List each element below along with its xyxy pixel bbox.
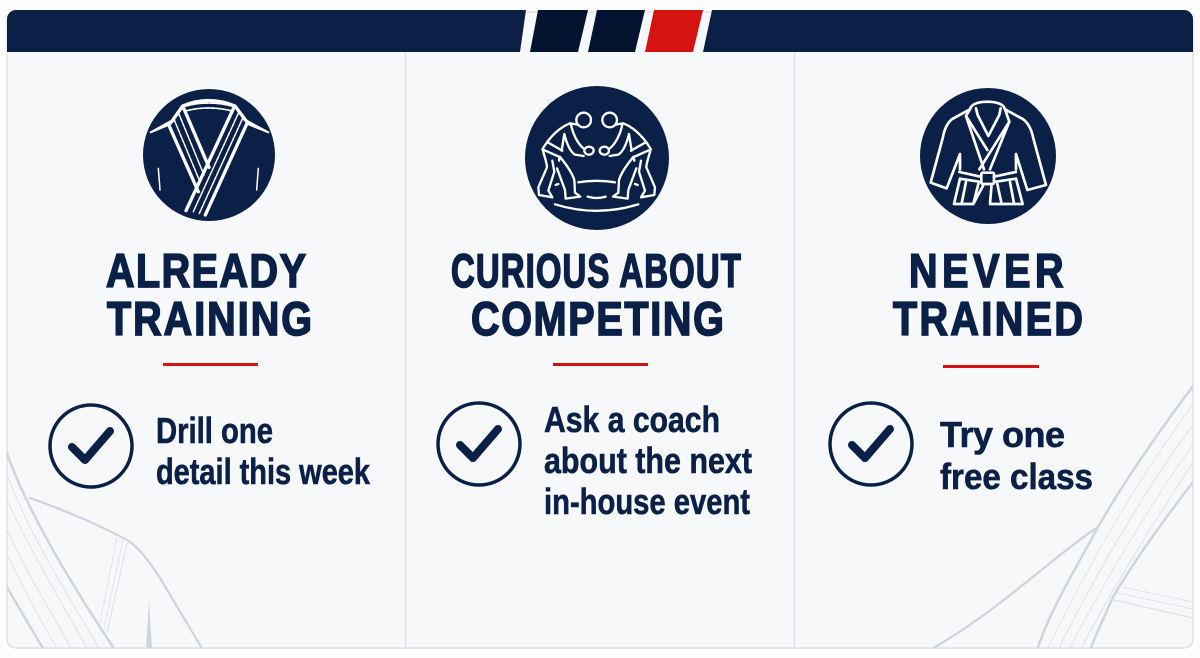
panel: curious about competing (438, 86, 752, 522)
action text (940, 414, 1093, 497)
panel: already training (50, 89, 371, 492)
red rule (553, 363, 648, 366)
red accent stripe (645, 10, 703, 52)
action text: detail this week (156, 451, 371, 492)
action text (156, 410, 371, 492)
icon: gi collar (143, 89, 275, 221)
header band (7, 10, 1193, 52)
red rule (943, 365, 1039, 368)
icon: gi jacket with belt (920, 88, 1056, 224)
action text: Try one (940, 414, 1065, 455)
heading: curious about competing: CURIOUS ABOUT (451, 244, 741, 297)
red rule (163, 363, 258, 366)
icon: check circle (438, 403, 520, 485)
panel: never trained (830, 88, 1093, 497)
action text: Ask a coach (544, 399, 720, 440)
panel: curious about competing: COMPETING (471, 294, 724, 346)
icon: check circle (830, 403, 912, 485)
left competitor (538, 113, 594, 199)
heading: never trained: NEVER (909, 246, 1064, 298)
background gi line art: bottom left (7, 453, 203, 650)
column dividers (406, 52, 794, 648)
right competitor (600, 113, 655, 199)
action text: free class (940, 456, 1093, 497)
icon: check circle (50, 405, 132, 487)
panel: already training: TRAINING (107, 294, 312, 346)
panel: never trained: TRAINED (893, 294, 1083, 346)
action text: about the next (544, 440, 752, 481)
action text (544, 399, 752, 522)
action text: in-house event (544, 481, 750, 522)
heading: already training: ALREADY (106, 246, 306, 298)
background gi line art: bottom right (930, 386, 1193, 650)
icon: two competitors gripping (525, 86, 669, 230)
action text: Drill one (156, 410, 273, 451)
